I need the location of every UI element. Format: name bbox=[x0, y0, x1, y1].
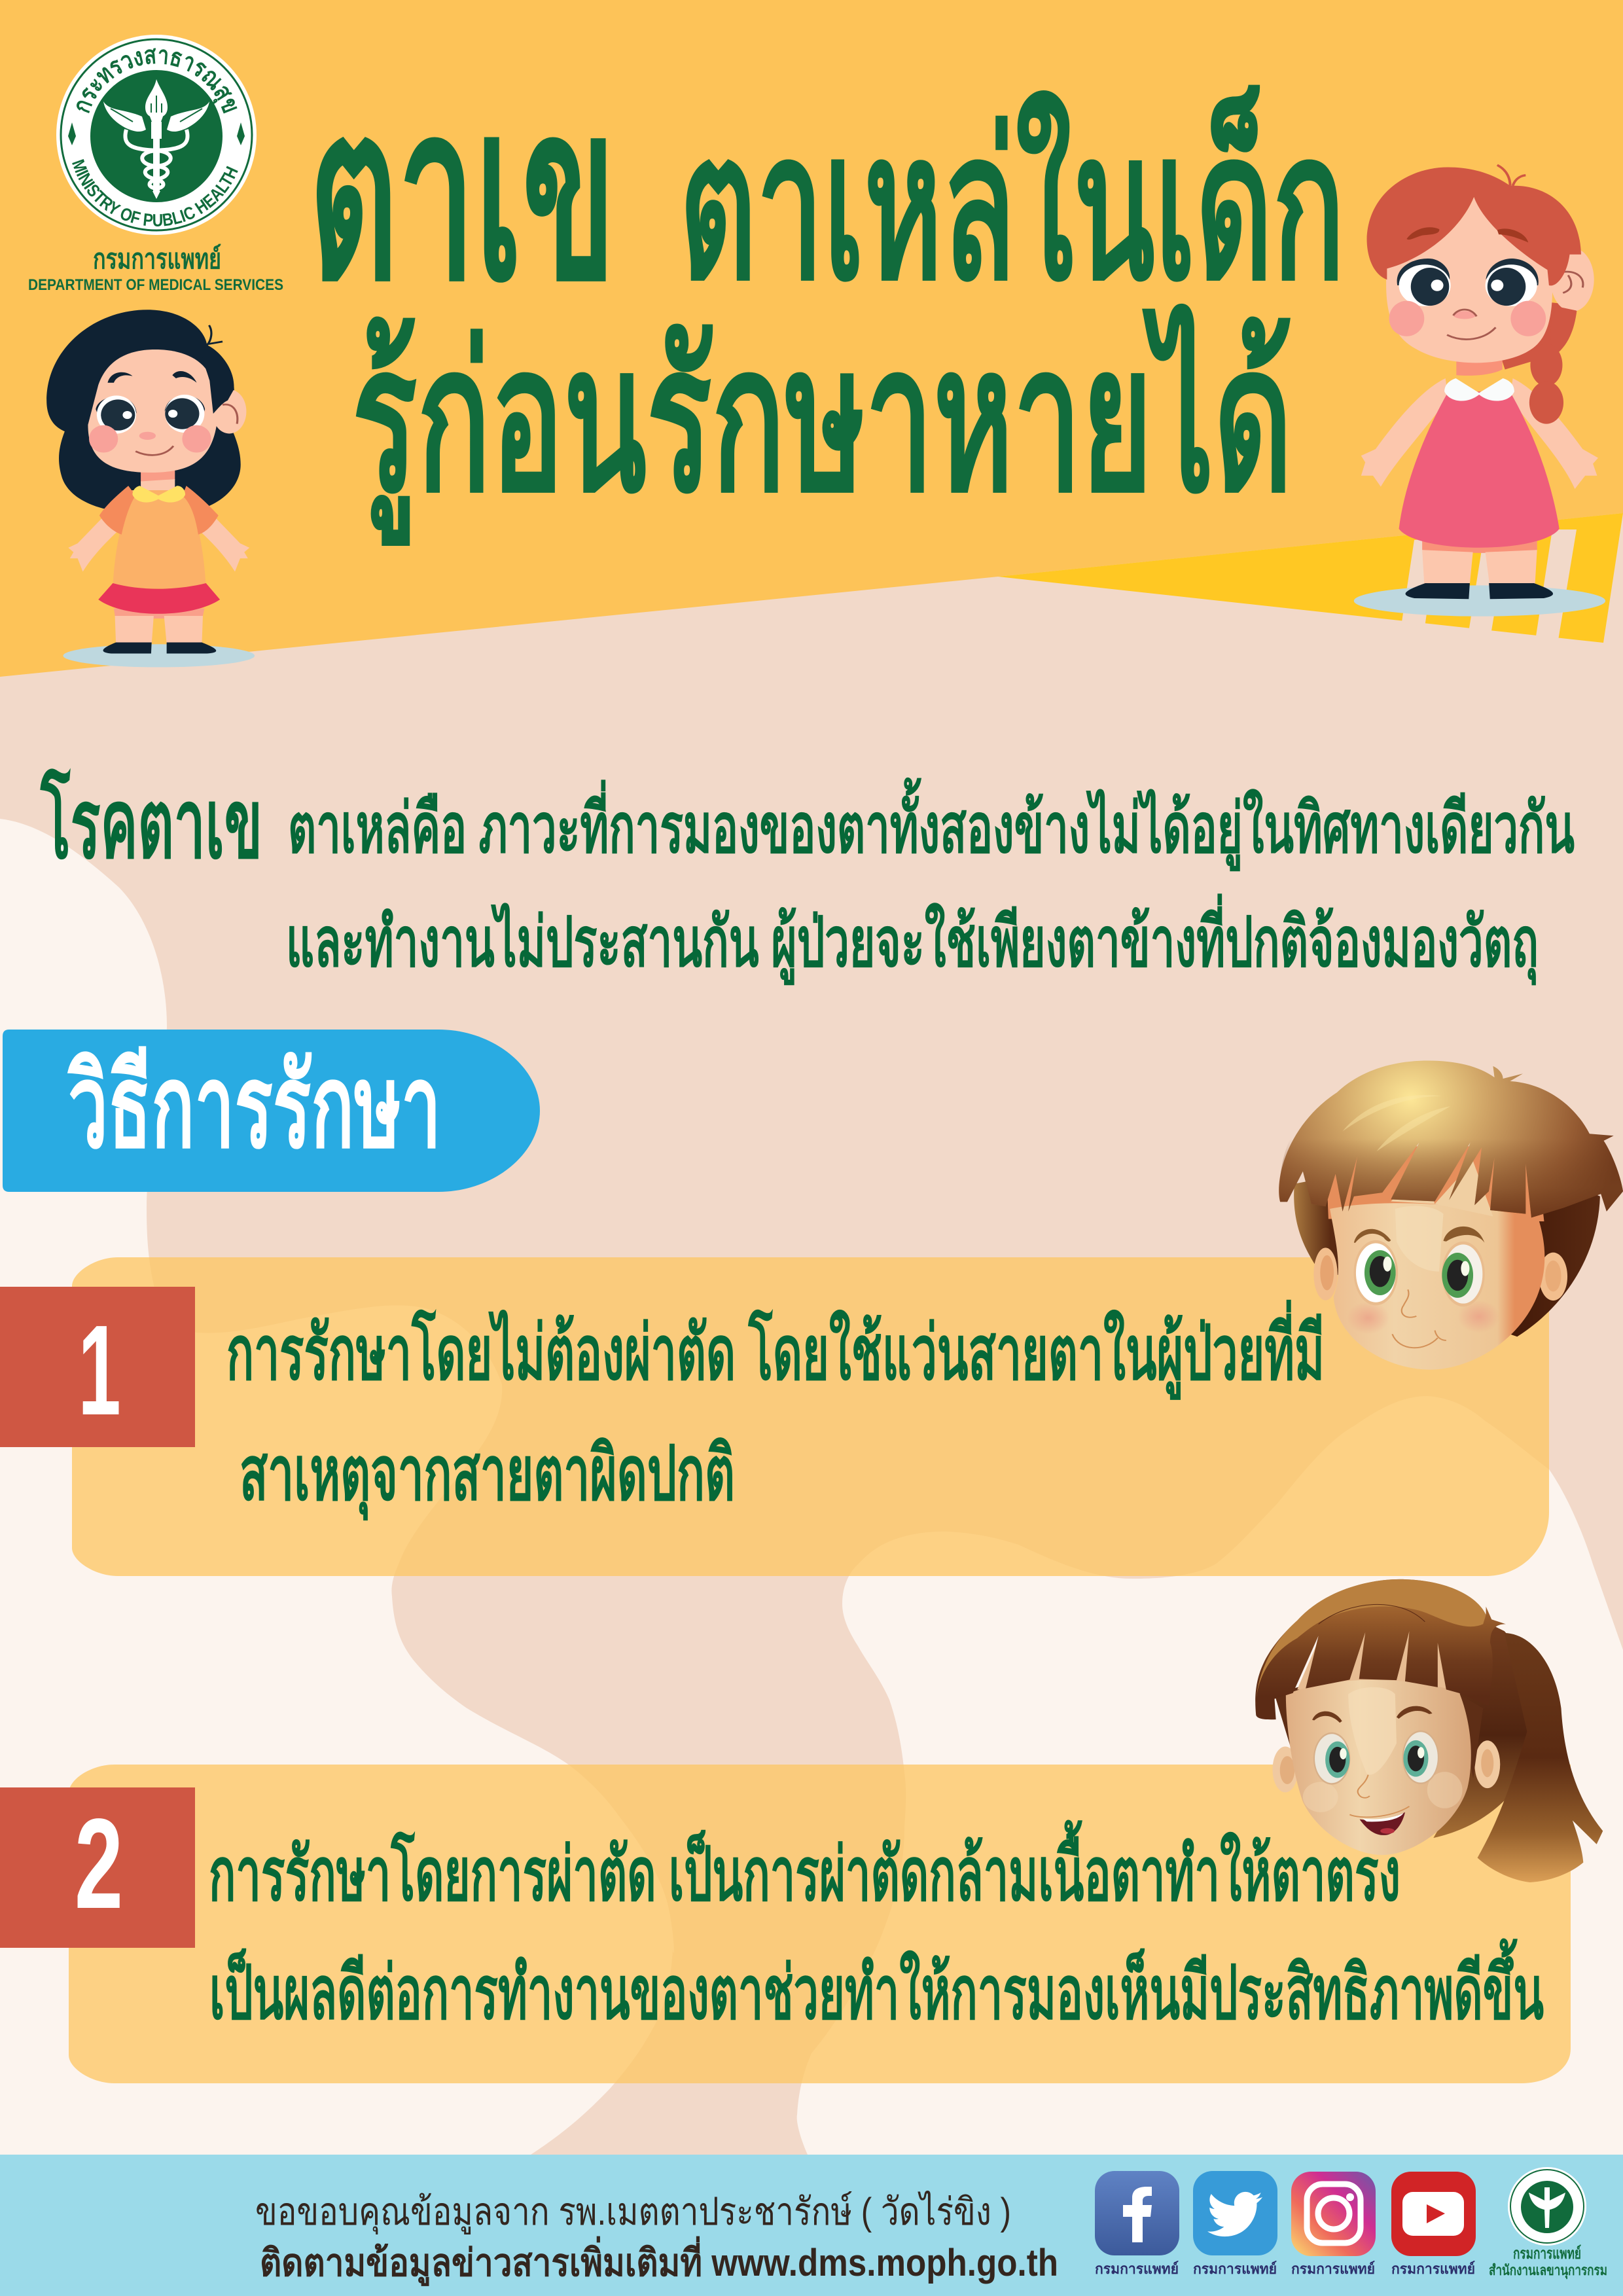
icon: instagram: กรมการแพทย์ bbox=[1291, 2261, 1375, 2277]
logo emblem: winged caduceus bbox=[103, 79, 209, 199]
girl head illustration bbox=[1255, 1579, 1603, 1882]
footer website text: ติดตามข้อมูลข่าวสารเพิ่มเติมที่ www.dms.moph.go.th bbox=[260, 2236, 1058, 2286]
logo ring text: English: MINISTRY OF PUBLIC HEALTH bbox=[72, 159, 238, 226]
panel: treatment 2 bbox=[0, 1765, 1571, 2083]
background blob: right cream bbox=[797, 1396, 1623, 2155]
background blob: left cream bbox=[0, 819, 674, 2155]
number badge 1 bbox=[0, 1287, 195, 1447]
icon: twitter bbox=[1193, 2171, 1277, 2277]
small logo and office name bbox=[1489, 2167, 1607, 2280]
footer band bbox=[0, 2155, 1623, 2296]
logo: Ministry of Public Health bbox=[56, 35, 257, 235]
treatment 1 text bbox=[226, 1300, 1325, 1520]
section heading: treatment bbox=[3, 1030, 540, 1192]
definition heading: โรคตาเข bbox=[40, 768, 262, 878]
panel: treatment 1 bbox=[0, 1257, 1549, 1576]
header yellow band bbox=[0, 0, 1623, 677]
icon: facebook: กรมการแพทย์ bbox=[1095, 2261, 1179, 2277]
department name bbox=[28, 243, 283, 294]
treatment 1 text: สาเหตุจากสายตาผิดปกติ bbox=[240, 1431, 735, 1520]
department name: กรมการแพทย์ bbox=[93, 243, 221, 274]
title bbox=[309, 57, 1345, 547]
definition text bbox=[286, 777, 1575, 986]
number badge 2 bbox=[0, 1787, 195, 1948]
treatment 2 text bbox=[209, 1820, 1544, 2035]
boy head illustration bbox=[1279, 1060, 1623, 1370]
footer credit text: ขอขอบคุณข้อมูลจาก รพ.เมตตาประชารักษ์ ( วัดไร่ขิง ) bbox=[255, 2190, 1011, 2235]
yellow wedge with stripes bbox=[998, 513, 1623, 643]
title: ตาเข bbox=[309, 57, 616, 329]
icon: twitter: กรมการแพทย์ bbox=[1193, 2261, 1277, 2277]
icon: youtube: กรมการแพทย์ bbox=[1391, 2261, 1475, 2277]
icon: youtube bbox=[1391, 2172, 1476, 2277]
logo ring text: Thai: กระทรวงสาธารณสุข bbox=[77, 48, 238, 114]
panel: treatment 2: 2 bbox=[75, 1791, 123, 1935]
department name: DEPARTMENT OF MEDICAL SERVICES bbox=[28, 276, 283, 294]
icon: facebook bbox=[1095, 2171, 1179, 2277]
logo side ornaments bbox=[68, 122, 245, 145]
girl character left bbox=[46, 310, 255, 667]
small logo and office name: กรมการแพทย์ bbox=[1513, 2244, 1581, 2263]
section heading: treatment: วิธีการรักษา bbox=[67, 1041, 441, 1172]
icon: instagram bbox=[1291, 2172, 1376, 2277]
panel: treatment 1: 1 bbox=[78, 1299, 121, 1442]
girl character right bbox=[1354, 165, 1605, 617]
